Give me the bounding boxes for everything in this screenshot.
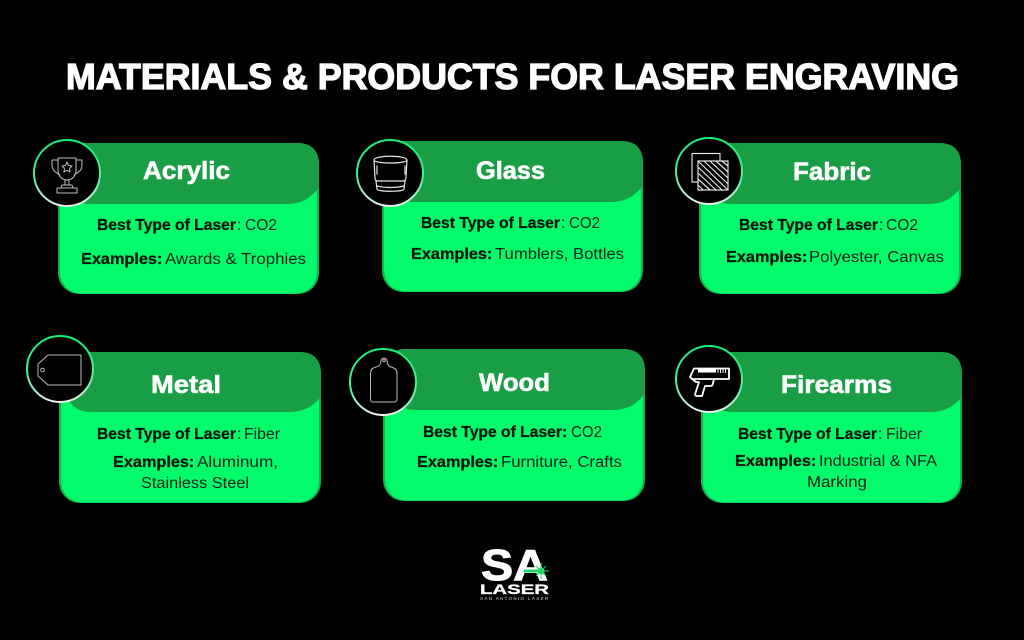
laser type: Best Type of Laser [421,215,560,232]
examples: : [493,454,498,471]
logo wordmark: LASER [480,581,549,597]
laser type: CO2 [571,424,602,441]
title: MATERIALS & PRODUCTS FOR LASER ENGRAVING [66,56,959,97]
examples: : [811,453,816,470]
laser type: : [562,424,567,441]
examples: Industrial & NFA [819,453,938,470]
examples: Examples [735,453,811,470]
laser type: : [237,217,241,234]
heading: Acrylic [143,157,230,185]
panel: metal [27,336,321,503]
card body [58,143,319,294]
laser type: Best Type of Laser [97,217,236,234]
examples: Examples [411,246,487,263]
examples: : [802,249,807,266]
card body [701,352,962,503]
card header [66,143,319,204]
examples: Awards & Trophies [165,251,306,268]
examples: Tumblers, Bottles [495,246,624,263]
examples: : [189,454,194,471]
panel: glass [357,140,643,292]
laser type: Best Type of Laser [97,426,236,443]
card body [699,143,961,294]
examples: Stainless Steel [141,475,249,492]
heading: Firearms [781,371,892,399]
panel: firearms [676,346,962,503]
examples: Aluminum, [197,454,278,471]
card body [382,141,643,292]
logo mark: SA [481,541,548,590]
examples [726,249,944,266]
laser type: Fiber [244,426,280,443]
laser type: Fiber [886,426,922,443]
laser type: CO2 [245,217,277,234]
icon: trophy [34,140,100,206]
examples: Marking [807,474,867,491]
icon: pistol [676,346,742,412]
examples: Polyester, Canvas [809,249,944,266]
examples: Examples [81,251,157,268]
examples [81,251,306,268]
examples [735,453,938,491]
heading: Wood [479,369,550,397]
icon: cutting board [350,349,416,415]
laser type: Best Type of Laser [739,217,878,234]
examples [417,454,622,471]
panel: acrylic [34,140,319,294]
examples [113,454,278,492]
icon: laser beam [524,563,549,579]
card header [390,141,643,202]
examples [411,246,624,263]
heading: Metal [151,371,221,399]
panel: fabric [676,138,961,294]
laser type: : [879,217,883,234]
examples: Examples [113,454,189,471]
card header [709,352,962,412]
laser type: CO2 [569,215,600,232]
laser type: Best Type of Laser [738,426,877,443]
laser type: Best Type of Laser [423,424,562,441]
examples: Furniture, Crafts [501,454,622,471]
examples: Examples [726,249,802,266]
panel: wood [350,349,645,501]
icon: fabric swatches [676,138,742,204]
card body [59,352,321,503]
examples: : [487,246,492,263]
examples: : [157,251,162,268]
examples: Examples [417,454,493,471]
card header [67,352,321,412]
laser type: : [237,426,241,443]
laser type: CO2 [886,217,918,234]
heading: Glass [476,157,545,185]
heading: Fabric [793,158,871,186]
logo: SA Laser [480,541,549,601]
laser type: : [878,426,882,443]
logo tagline: SAN ANTONIO LASER [480,596,549,601]
card header [707,143,961,204]
card header [391,349,645,410]
icon: tag [27,336,93,402]
card body [383,349,645,501]
icon: tumbler [357,140,423,206]
laser type: : [561,215,565,232]
